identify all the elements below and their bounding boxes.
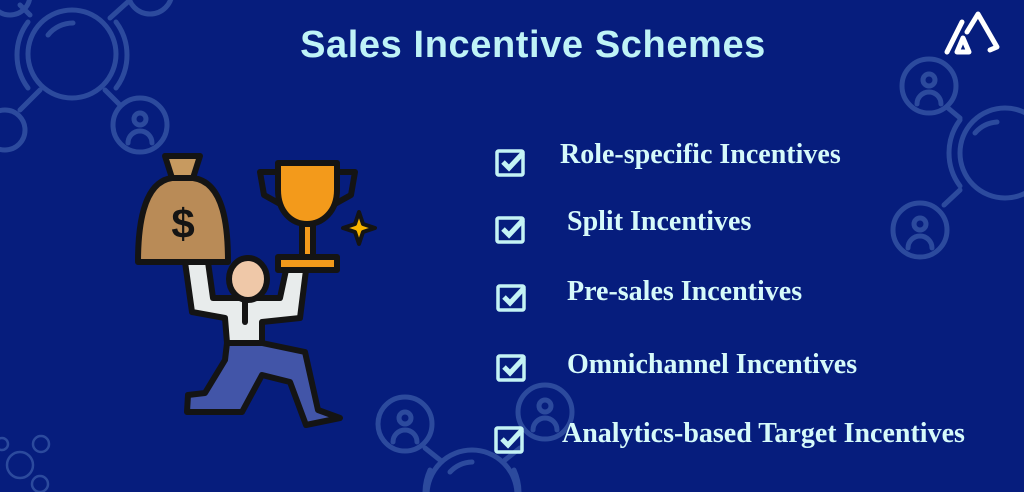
title: Sales Incentive Schemes bbox=[300, 24, 766, 66]
item: Role-specific: Role-specific Incentives bbox=[560, 139, 841, 170]
illustration: man with money bag and trophy: $ bbox=[171, 200, 195, 247]
icon: head bbox=[229, 258, 267, 300]
illustration: man with money bag and trophy bbox=[135, 153, 377, 428]
item: Split bbox=[495, 206, 751, 244]
icon: sparkle bbox=[343, 212, 375, 244]
icon: money bag bbox=[165, 156, 200, 178]
icon: pants bbox=[187, 343, 340, 425]
logo bbox=[944, 12, 1000, 54]
item: Analytics-based: Analytics-based Target Incentives bbox=[562, 418, 965, 449]
item: Role-specific bbox=[495, 139, 841, 177]
item: Split: Split Incentives bbox=[567, 206, 751, 237]
icon: trophy bbox=[260, 172, 355, 205]
item: Pre-sales bbox=[496, 276, 802, 312]
checklist bbox=[494, 139, 965, 454]
item: Omnichannel: Omnichannel Incentives bbox=[567, 349, 857, 380]
item: Pre-sales: Pre-sales Incentives bbox=[567, 276, 802, 307]
icon: shirt bbox=[185, 262, 306, 343]
